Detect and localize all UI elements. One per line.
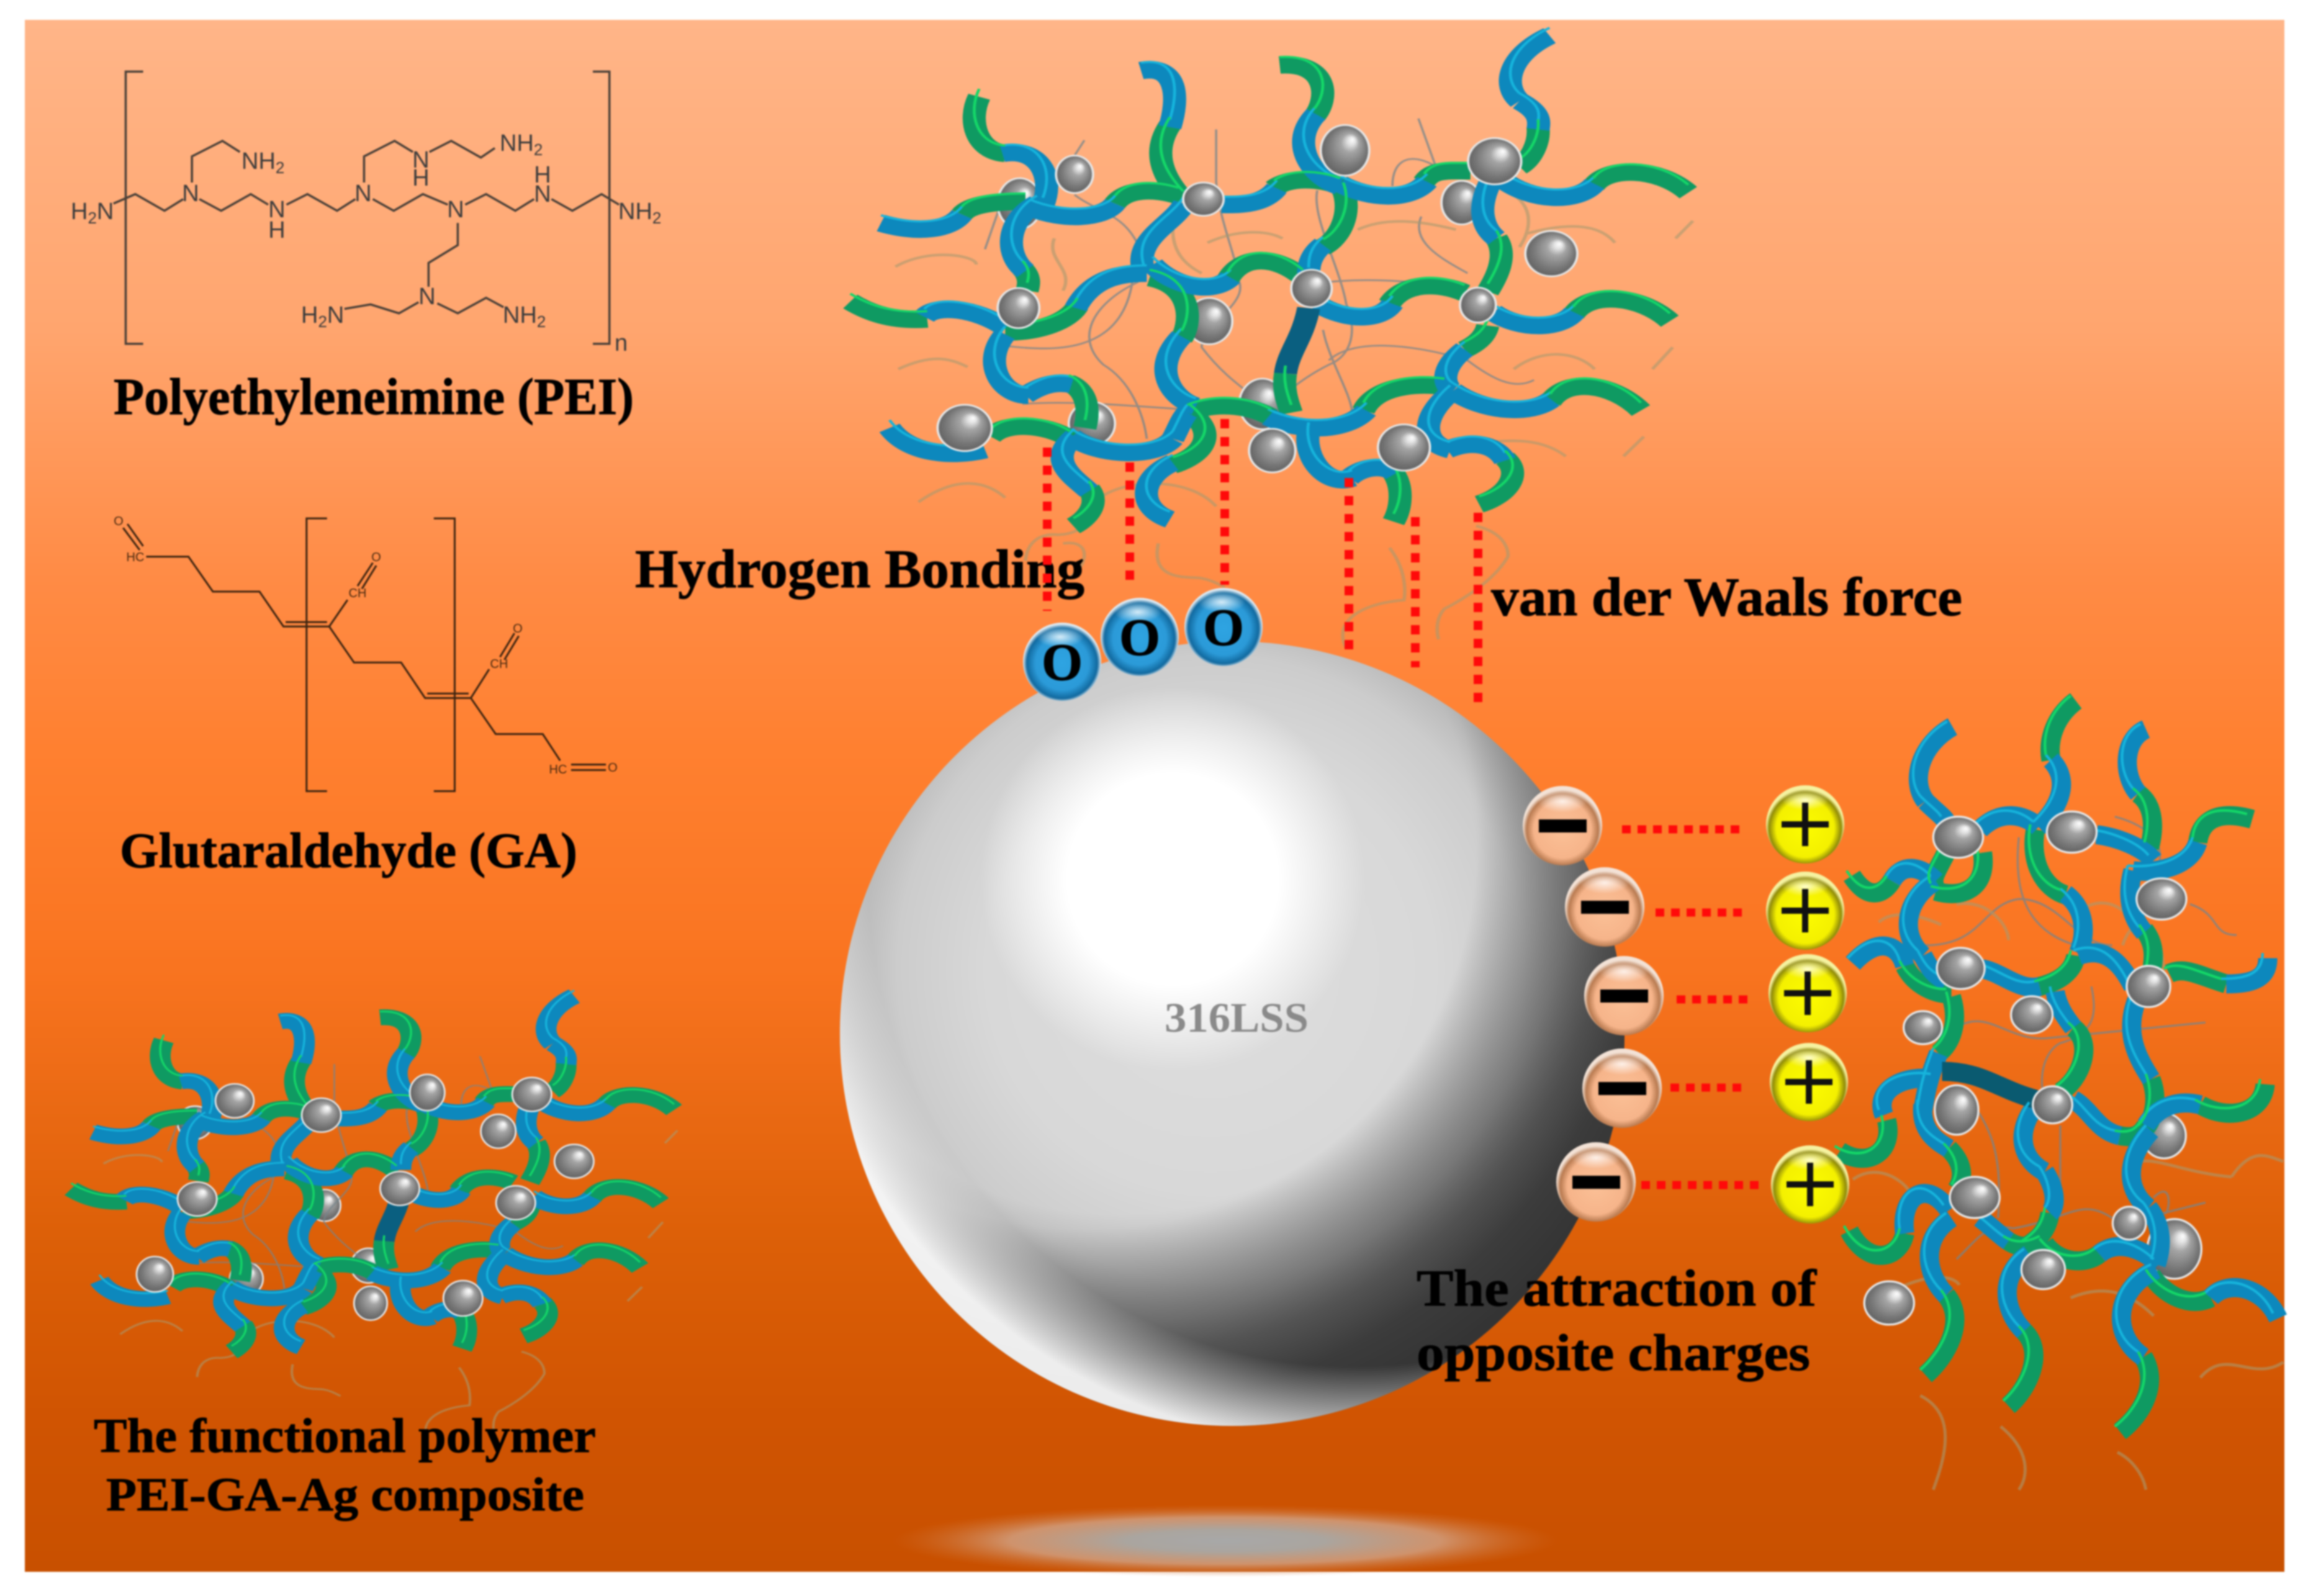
caption: functional polymer: PEI-GA-Ag composite xyxy=(106,1469,584,1521)
PEI chemical structure: NH xyxy=(241,148,276,174)
silver nanoparticles in front xyxy=(1864,811,2186,1325)
blue and green ribbons xyxy=(71,991,674,1351)
PEI chemical structure: N xyxy=(418,284,436,310)
PEI chemical structure: N xyxy=(534,181,551,207)
PEI chemical structure: H xyxy=(268,217,286,243)
PEI chemical structure: NH xyxy=(500,130,534,156)
label: attraction of opposite charges xyxy=(1417,1260,1817,1382)
PEI chemical structure: H xyxy=(71,199,88,225)
PEI chemical structure: N xyxy=(412,147,430,173)
PEI chemical structure xyxy=(71,71,661,356)
PEI chemical structure: H xyxy=(412,165,430,191)
silver nanoparticles in front xyxy=(937,125,1577,472)
sphere floor shadow xyxy=(893,1505,1557,1577)
positive charges xyxy=(1766,785,1849,1224)
GA chemical structure: O xyxy=(114,515,124,528)
GA chemical structure: CH xyxy=(490,657,508,671)
PEI chemical structure: 2 xyxy=(534,140,543,159)
PEI chemical structure: H xyxy=(534,162,551,188)
polymer network: bottom left xyxy=(71,991,677,1440)
oxygen atoms: O xyxy=(1203,598,1244,657)
PEI chemical structure: N xyxy=(268,197,286,223)
PEI chemical structure: N xyxy=(97,199,114,225)
polymer network: right xyxy=(1835,696,2283,1490)
label: 316LSS: 316LSS xyxy=(1165,994,1309,1041)
oxygen atoms: O xyxy=(1042,633,1083,692)
oxygen atoms: O xyxy=(1119,608,1160,667)
blue and green ribbons xyxy=(1835,696,2278,1431)
PEI chemical structure: NH xyxy=(618,199,652,225)
PEI chemical structure: NH xyxy=(503,302,537,328)
silver nanoparticles behind ribbons xyxy=(998,178,1482,445)
negative charges xyxy=(1523,786,1664,1222)
PEI chemical structure: N xyxy=(447,197,464,223)
GA chemical structure: O xyxy=(513,622,523,636)
polymer network: top xyxy=(850,28,1693,648)
PEI chemical structure: n xyxy=(615,330,628,356)
heading: Polyethyleneimine: Polyethyleneimine (PEI) xyxy=(114,368,634,426)
vertical dotted bonds xyxy=(1047,419,1478,709)
oxygen atoms xyxy=(1023,588,1263,701)
PEI chemical structure: N xyxy=(182,181,199,207)
316LSS sphere xyxy=(840,641,1625,1426)
PEI chemical structure: 2 xyxy=(318,312,327,331)
label: hydrogen bonding: Hydrogen Bonding xyxy=(635,539,1084,600)
GA chemical structure: HC xyxy=(127,551,144,564)
PEI chemical structure: N xyxy=(327,302,344,328)
silver nanoparticles behind bottom left ribbons xyxy=(178,1106,386,1296)
PEI chemical structure: 2 xyxy=(537,312,546,331)
horizontal dotted attraction lines xyxy=(1622,829,1759,1185)
caption: functional polymer xyxy=(94,1409,596,1521)
GA chemical structure: HC xyxy=(549,763,567,777)
PEI chemical structure: 2 xyxy=(652,209,661,227)
GA chemical structure xyxy=(114,515,618,791)
caption: functional polymer: The functional polymer xyxy=(94,1409,596,1463)
PEI chemical structure: H xyxy=(301,302,318,328)
PEI chemical structure: 2 xyxy=(276,158,284,177)
label: attraction of opposite charges: The attraction of xyxy=(1417,1260,1817,1317)
PEI chemical structure: 2 xyxy=(88,209,97,227)
silver nanoparticles behind ribbons xyxy=(1935,1085,2201,1279)
label: van der Waals force: van der Waals force xyxy=(1491,567,1962,628)
heading: Glutaraldehyde: Glutaraldehyde (GA) xyxy=(120,824,577,878)
PEI chemical structure: N xyxy=(354,181,372,207)
GA chemical structure: O xyxy=(608,761,618,775)
blue and green ribbons xyxy=(850,28,1688,526)
GA chemical structure: O xyxy=(371,551,381,564)
GA chemical structure: CH xyxy=(349,587,366,600)
label: attraction of opposite charges: opposite charges xyxy=(1417,1324,1810,1382)
silver nanoparticles: bottom left network xyxy=(137,1075,593,1320)
